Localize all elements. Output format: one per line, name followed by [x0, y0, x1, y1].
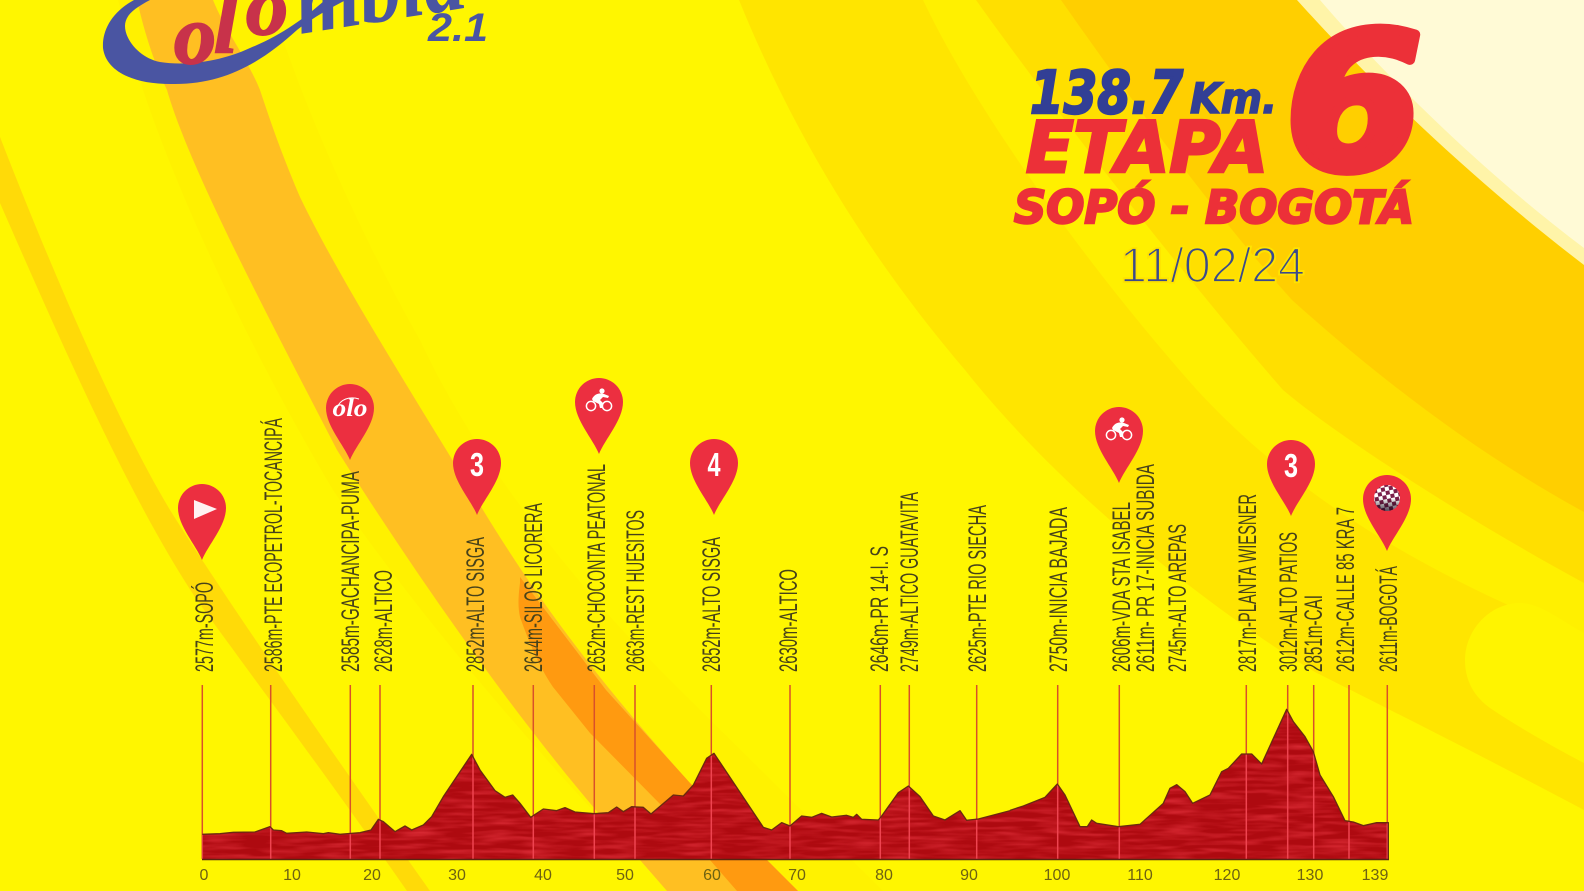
route point labels: 2586m-PTE ECOPETROL-TOCANCIPÁ [259, 418, 288, 672]
icon: category 3 pin: 3 [470, 446, 484, 483]
route point labels: 3012m-ALTO PATIOS [1275, 532, 1303, 672]
icon: start pin [178, 484, 226, 560]
route: SOPÓ - BOGOTÁ [1014, 181, 1414, 234]
route point labels: 2628m-ALTICO [370, 570, 398, 672]
km axis labels: 90 [960, 867, 978, 884]
route point labels: 2611m- PR 17-INICIA SUBIDA [1132, 464, 1160, 672]
date: 11/02/24 [1120, 239, 1305, 293]
route point labels: 2577m-SOPÓ [190, 582, 219, 672]
icon: logo pin: olo [332, 395, 368, 422]
icon: sprint rider pin [575, 378, 623, 454]
km axis labels: 100 [1044, 867, 1070, 884]
profile outline [202, 709, 1388, 859]
logo: Colombia 2.1 [103, 0, 488, 84]
icon: category 4 pin [690, 439, 738, 515]
route point labels: 2663m-REST HUESITOS [622, 510, 650, 672]
route point labels: 2851m-CAI [1300, 595, 1328, 672]
route point labels: 2745m-ALTO AREPAS [1164, 524, 1192, 672]
icon: logo pin [326, 384, 374, 460]
icon: category 3 pin 2 [1267, 440, 1315, 516]
route point labels: 2611m-BOGOTÁ [1374, 566, 1403, 672]
distance unit: Km. [1190, 74, 1277, 123]
km axis labels: 130 [1297, 867, 1323, 884]
route point labels: 2817m-PLANTA WIESNER [1234, 494, 1262, 672]
km axis labels: 110 [1127, 867, 1153, 884]
km axis labels: 30 [448, 867, 466, 884]
icon: finish checkered pin [1363, 475, 1411, 551]
km axis labels: 70 [788, 867, 806, 884]
km axis labels: 139 [1362, 867, 1388, 884]
km axis labels: 0 [200, 867, 209, 884]
route point labels: 2606m-VDA STA ISABEL [1108, 502, 1136, 672]
km axis labels: 20 [363, 867, 381, 884]
title block [1014, 0, 1422, 293]
km axis labels: 40 [534, 867, 552, 884]
km axis labels: 80 [875, 867, 893, 884]
icon: category 3 pin [453, 439, 501, 515]
route point labels: 2652m-CHOCONTA PEATONAL [583, 464, 611, 672]
profile fill [202, 710, 1388, 859]
route point labels: 2585m-GACHANCIPA-PUMA [337, 471, 365, 672]
route point labels: 2612m-CALLE 85 KRA 7 [1332, 507, 1360, 672]
route point labels: 2644m-SILOS LICORERA [520, 503, 548, 672]
route point labels [190, 418, 1403, 672]
route point labels: 2750m-INICIA BAJADA [1045, 507, 1073, 672]
route point labels: 2852m-ALTO SISGA [698, 537, 726, 672]
route point labels: 2852m-ALTO SISGA [462, 537, 490, 672]
distance: 138.7 [1030, 58, 1183, 127]
icon: sprint rider pin 2 [1095, 407, 1143, 483]
km axis labels: 10 [283, 867, 301, 884]
km axis labels: 60 [703, 867, 721, 884]
km axis labels [200, 867, 1388, 884]
route point labels: 2749m-ALTICO GUATAVITA [896, 492, 924, 672]
stage number: 6 [1286, 0, 1422, 213]
logo swoosh [103, 0, 346, 84]
icon: category 3 pin 2: 3 [1284, 447, 1298, 484]
km axis labels: 50 [616, 867, 634, 884]
elevation profile chart [200, 685, 1390, 860]
stage label: ETAPA [1026, 107, 1268, 189]
route point labels: 2630m-ALTICO [775, 569, 803, 672]
marker lines above profile [202, 685, 1387, 859]
logo edition: 2.1 [427, 6, 488, 50]
icon: category 4 pin: 4 [708, 446, 721, 483]
route point labels: 2625m-PTE RIO SIECHA [964, 505, 992, 672]
km axis labels: 120 [1214, 867, 1240, 884]
route point labels: 2646m-PR 14-I. S [866, 546, 894, 672]
